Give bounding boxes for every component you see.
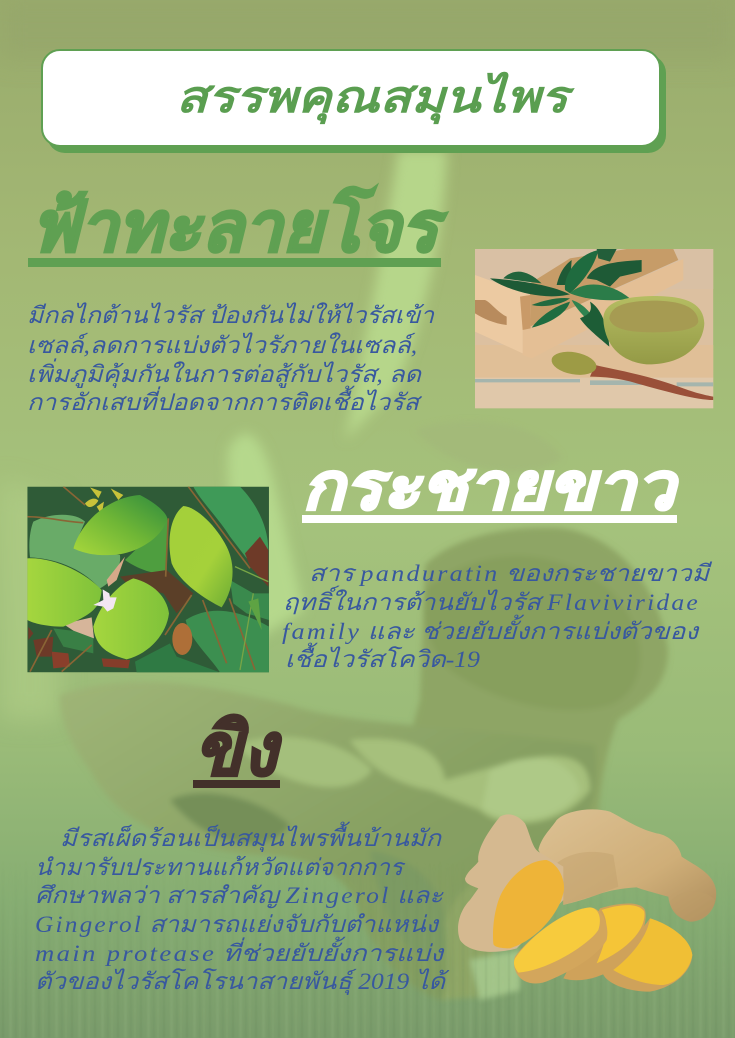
flower: [93, 589, 117, 612]
leaf: [169, 506, 233, 607]
main leaves: [565, 250, 598, 293]
text block: ขิง: [35, 821, 449, 995]
left rhizome: [60, 682, 596, 1000]
icon: ginger root and slices: [458, 809, 716, 992]
text block: ฟ้าทะลายโจร: [27, 302, 435, 415]
leaf: [93, 578, 169, 659]
text block: ขิง: นำมารับประทานแก้หวัดแต่จากการ: [35, 855, 406, 880]
text block: กระชายขาว: เชื้อไวรัสโควิด-19: [285, 642, 481, 672]
slice 2: [563, 904, 646, 980]
leaf: [73, 495, 167, 555]
text block: กระชายขาว: ฤทธิ์ในการต้านยับไวรัส Flaviviridae: [283, 585, 700, 615]
photo: กระชายขาว leaves: [27, 487, 269, 672]
slice 3: [603, 918, 692, 992]
upper rhizome: [538, 809, 716, 922]
left rhizome: [458, 814, 563, 952]
text block: ขิง: ศึกษาพลว่า สารสำคัญ Zingerol และ: [35, 883, 444, 909]
tray: [530, 249, 678, 327]
slice 1: [514, 907, 607, 983]
text block: ขิง: Gingerol สามารถแย่งจับกับตำแหน่ง: [35, 912, 440, 937]
yellow sprigs: [85, 488, 124, 512]
text block: ฟ้าทะลายโจร: การอักเสบที่ปอดจากการติดเชื้อไวรัส: [27, 385, 423, 415]
leaf: [27, 558, 102, 627]
text block: กระชายขาว: [282, 561, 712, 672]
heading: กระชายขาว: กระชายขาว: [302, 449, 679, 523]
back leaves: [193, 487, 268, 558]
bowl: [603, 296, 704, 364]
text block: ขิง: main protease ที่ช่วยยับยั้งการแบ่ง: [35, 936, 445, 966]
title banner: [42, 50, 666, 153]
text block: ฟ้าทะลายโจร: เซลล์,ลดการแบ่งตัวไวรัภายในเซลล์,: [27, 332, 417, 358]
heading: ขิง: ขิง: [194, 708, 283, 791]
text block: กระชายขาว: สาร panduratin ของกระชายขาวมี: [309, 561, 712, 586]
right rhizome: [395, 528, 668, 1000]
heading: ฟ้าทะลายโจร: ฟ้าทะลายโจร: [30, 186, 447, 266]
browns: [245, 537, 268, 587]
title text: สรรพคุณสมุนไพร: [176, 71, 575, 125]
text block: ฟ้าทะลายโจร: มีกลไกต้านไวรัส ป้องกันไม่ให้ไวรัสเข้า: [27, 302, 435, 328]
cut face: [493, 860, 564, 948]
text block: ฟ้าทะลายโจร: เพิ่มภูมิคุ้มกันในการต่อสู้กับไวรัส, ลด: [27, 358, 422, 388]
photo: ฟ้าทะลายโจร powder and leaves: [475, 249, 713, 408]
text block: กระชายขาว: family และ ช่วยยับยั้งการแบ่งตัวของ: [282, 614, 700, 644]
far leaves: [557, 260, 642, 287]
text block: ขิง: ตัวของไวรัสโคโรนาสายพันธุ์ 2019 ได้: [35, 968, 449, 995]
stems: [27, 487, 255, 672]
spoon: [590, 365, 713, 400]
text block: ขิง: มีรสเผ็ดร้อนเป็นสมุนไพรพื้นบ้านมัก: [60, 821, 442, 852]
